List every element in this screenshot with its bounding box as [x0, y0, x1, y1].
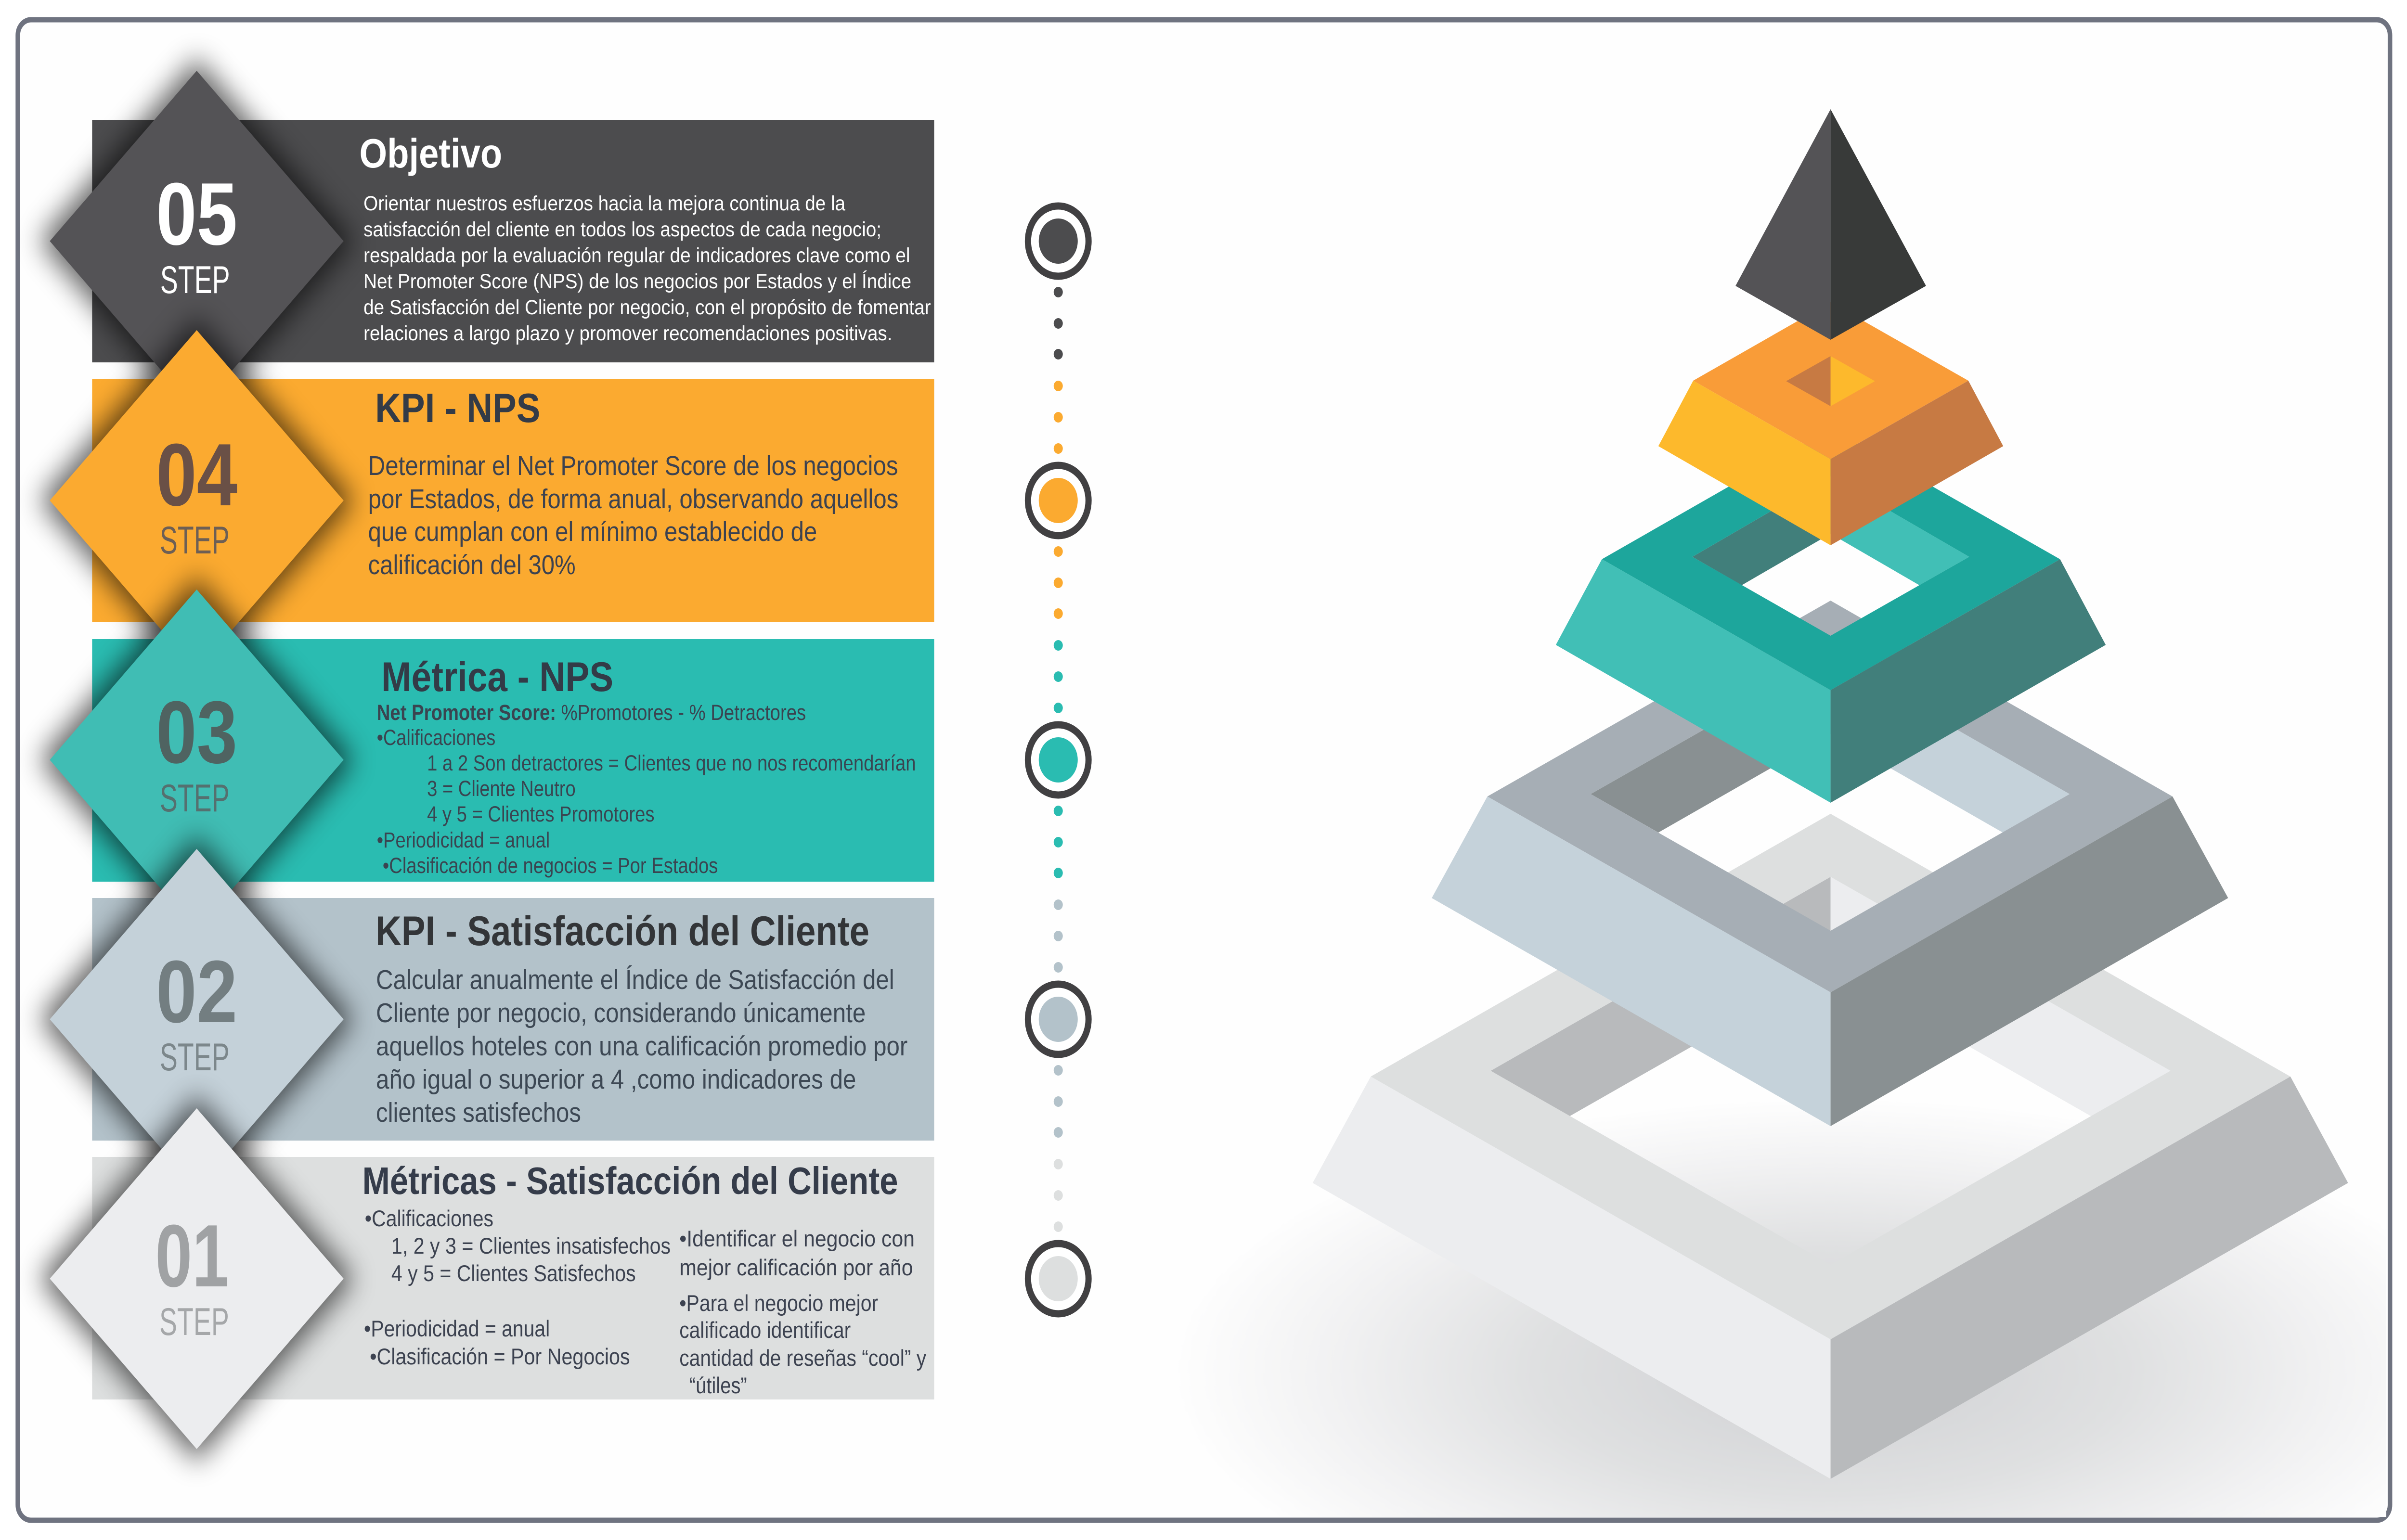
diamond: step 05 — [39, 58, 354, 424]
panel: step 03 metrica NPS — [92, 639, 934, 882]
timeline dots — [1054, 287, 1063, 1232]
diamond: step 03 — [39, 577, 354, 943]
timeline node 04 — [1028, 465, 1088, 536]
ground shadow — [1172, 1097, 2386, 1517]
timeline node 05 — [1028, 206, 1088, 276]
step number 05: 05 — [156, 165, 237, 264]
band 01 — [92, 1157, 934, 1399]
text block: right column: “útiles” — [689, 1373, 747, 1399]
text block: KPI satisfaccion body — [376, 965, 907, 1128]
pyramid layer 5: dark apex — [1735, 109, 1926, 340]
diamond: step 01 — [39, 1096, 354, 1462]
text block: objetivo body: Orientar nuestros esfuerzos hacia la mejora continua de la — [363, 192, 846, 215]
text block: right column: calificado identificar — [679, 1318, 851, 1343]
text block: KPI satisfaccion body: Calcular anualmente el Índice de Satisfacción del — [376, 965, 894, 995]
text block: KPI NPS body: por Estados, de forma anual, observando aquellos — [368, 484, 898, 514]
timeline — [1028, 206, 1088, 1314]
text block: KPI NPS body — [368, 451, 898, 580]
text block: metrica NPS list: 1 a 2 Son detractores = Clientes que no nos recomendarían — [427, 751, 916, 775]
panel: step 04 KPI NPS — [92, 379, 934, 622]
pyramid layer 1: light gray — [1313, 814, 2348, 1479]
step number 03: 03 — [156, 683, 237, 782]
band 04 — [92, 379, 934, 622]
text block: objetivo body — [363, 192, 931, 345]
text block: right column — [679, 1226, 926, 1399]
heading: Métrica - NPS: Métrica - NPS — [381, 654, 613, 700]
step label: STEP — [160, 1036, 230, 1079]
step label: STEP — [159, 1300, 229, 1344]
text block: left column: •Periodicidad = anual — [364, 1316, 550, 1342]
step label: STEP — [160, 519, 230, 562]
band 02 — [92, 898, 934, 1141]
text block: objetivo body: satisfacción del cliente en todos los aspectos de cada negocio; — [363, 218, 881, 241]
step number 04: 04 — [156, 426, 237, 525]
text block: left column: •Calificaciones — [365, 1206, 493, 1232]
text block: left column: 4 y 5 = Clientes Satisfechos — [391, 1261, 636, 1286]
step number 02: 02 — [156, 943, 237, 1041]
text block: KPI NPS body: calificación del 30% — [368, 550, 576, 580]
pyramid illustration — [1172, 109, 2386, 1517]
heading: KPI - NPS: KPI - NPS — [375, 385, 540, 431]
text block: KPI satisfaccion body: aquellos hoteles con una calificación promedio por — [376, 1031, 907, 1062]
text block: metrica NPS list: 4 y 5 = Clientes Promotores — [427, 802, 654, 826]
text block: KPI NPS body: Determinar el Net Promoter Score de los negocios — [368, 451, 898, 481]
text block: right column: mejor calificación por año — [679, 1255, 913, 1281]
panel: step 05 objetivo — [92, 120, 934, 362]
text block: KPI satisfaccion body: Cliente por negocio, considerando únicamente — [376, 998, 866, 1028]
text block: right column: •Identificar el negocio con — [679, 1226, 915, 1252]
text block: metrica NPS list: Net Promoter Score: %Promotores - % Detractores — [377, 700, 806, 725]
diamond: step 02 — [39, 836, 354, 1202]
panel: step 02 KPI satisfaccion — [92, 898, 934, 1141]
heading: Objetivo: Objetivo — [360, 130, 502, 176]
text block: KPI NPS body: que cumplan con el mínimo establecido de — [368, 517, 817, 547]
text block: objetivo body: relaciones a largo plazo y promover recomendaciones positivas. — [363, 321, 892, 345]
text block: metrica NPS list: 3 = Cliente Neutro — [427, 776, 576, 801]
pyramid layer 3: teal — [1556, 428, 2106, 803]
text block: objetivo body: de Satisfacción del Cliente por negocio, con el propósito de fomentar — [363, 295, 931, 319]
band 05 — [92, 120, 934, 362]
step label: STEP — [160, 777, 230, 820]
step number 01: 01 — [155, 1207, 229, 1306]
heading: Métricas - Satisfacción del Cliente: Métricas - Satisfacción del Cliente — [362, 1159, 898, 1202]
timeline node 02 — [1028, 984, 1088, 1054]
text block: objetivo body: Net Promoter Score (NPS) de los negocios por Estados y el Índice — [363, 270, 911, 293]
heading: KPI - Satisfacción del Cliente: KPI - Satisfacción del Cliente — [375, 908, 869, 954]
pyramid layer 2: blue gray — [1432, 601, 2228, 1126]
text block: right column: •Para el negocio mejor — [679, 1291, 878, 1316]
panel: step 01 metricas satisfaccion — [92, 1157, 934, 1399]
diamond: step 04 — [39, 318, 354, 683]
text block: left column: •Clasificación = Por Negocios — [370, 1344, 630, 1370]
text block: objetivo body: respaldada por la evaluación regular de indicadores clave como el — [363, 244, 910, 267]
timeline node 01 — [1028, 1244, 1088, 1314]
text block: right column: cantidad de reseñas “cool” y — [679, 1346, 926, 1371]
text block: metrica NPS list: •Calificaciones — [377, 725, 495, 750]
text block: KPI satisfaccion body: año igual o superior a 4 ,como indicadores de — [376, 1065, 856, 1095]
text block: metrica NPS list: •Clasificación de negocios = Por Estados — [383, 853, 718, 878]
text block: left column: 1, 2 y 3 = Clientes insatisfechos — [391, 1233, 671, 1259]
text block: left column — [364, 1206, 671, 1370]
text block: KPI satisfaccion body: clientes satisfechos — [376, 1098, 581, 1128]
step label: STEP — [160, 258, 230, 302]
text block: metrica NPS list: •Periodicidad = anual — [377, 828, 550, 852]
band 03 — [92, 639, 934, 882]
pyramid layer 4: orange — [1658, 302, 2003, 545]
timeline node 03 — [1028, 725, 1088, 795]
text block: metrica NPS list — [377, 700, 916, 878]
